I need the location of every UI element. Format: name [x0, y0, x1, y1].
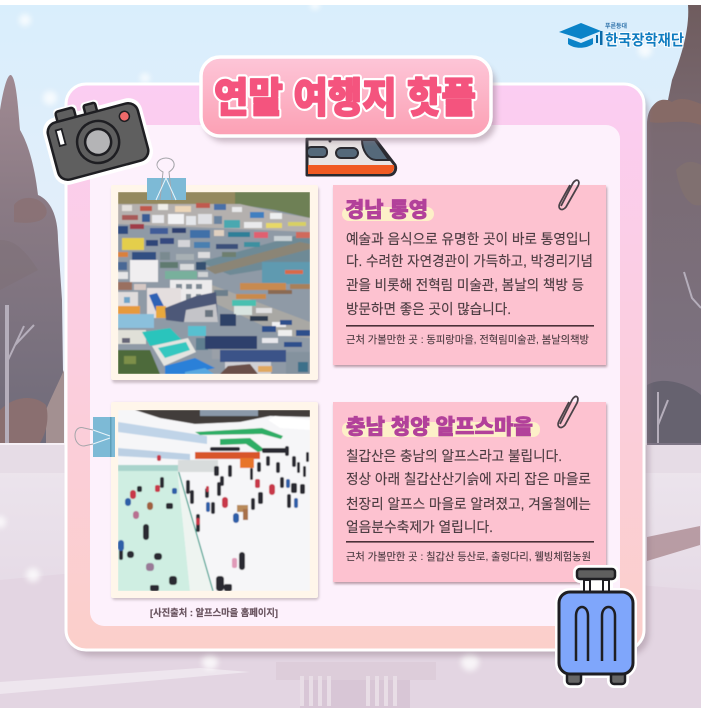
- icon: camera: [38, 87, 156, 188]
- main card: [66, 84, 649, 656]
- logo: Korea Student Aid Foundation: 한국장학재단: [605, 32, 684, 49]
- caption: photo source: [사진출처 : 알프스마을 홈페이지]: [150, 607, 278, 619]
- inner panel: [90, 125, 620, 626]
- title banner: 연말 여행지 핫플: [214, 75, 476, 121]
- body text: 방문하면 좋은 곳이 많습니다.: [346, 301, 511, 317]
- binder clip on photo 1: [147, 158, 186, 200]
- text panel 1: Gyeongnam Tongyeong: [333, 185, 607, 367]
- body text: [346, 448, 591, 535]
- nearby places: 근처 가볼만한 곳 : 동피랑마을, 전혁림미술관, 봄날의책방: [346, 334, 589, 346]
- heading: 충남 청양 알프스마을: [346, 416, 533, 439]
- left tree: [0, 75, 64, 443]
- text panel 2: Chungnam Cheongyang Alps Village: [333, 402, 607, 584]
- title banner: [201, 57, 496, 142]
- body text: 다. 수려한 자연경관이 가득하고, 박경리기념: [346, 253, 593, 269]
- logo: Korea Student Aid Foundation: 푸른등대: [605, 22, 627, 30]
- right tree: [647, 5, 701, 445]
- body text: 얼음분수축제가 열립니다.: [346, 519, 493, 535]
- body text: [346, 231, 593, 317]
- paperclip 1: [559, 180, 579, 210]
- paperclip 2: [558, 396, 578, 428]
- heading: 경남 통영: [345, 199, 428, 222]
- title banner: 연말 여행지 핫플: [214, 75, 476, 121]
- icon: train: [307, 139, 396, 175]
- logo: Korea Student Aid Foundation: [559, 22, 684, 49]
- photo card 2: Cheongyang Alps Village: [111, 402, 319, 600]
- body text: 천장리 알프스 마을로 알려졌고, 겨울철에는: [346, 496, 591, 512]
- photo card 1: Tongyeong: [111, 185, 319, 383]
- body text: 정상 아래 칠갑산산기슭에 자리 잡은 마을로: [346, 471, 591, 487]
- body text: 칠갑산은 충남의 알프스라고 불립니다.: [346, 448, 562, 464]
- body text: 관을 비롯해 전혁림 미술관, 봄날의 책방 등: [346, 277, 584, 293]
- nearby places: 근처 가볼만한 곳 : 칠갑산 등산로, 출렁다리, 웰빙체험농원: [346, 551, 591, 563]
- icon: suitcase: [559, 569, 633, 684]
- body text: 예술과 음식으로 유명한 곳이 바로 통영입니: [346, 231, 591, 247]
- binder clip on photo 2: [75, 417, 115, 457]
